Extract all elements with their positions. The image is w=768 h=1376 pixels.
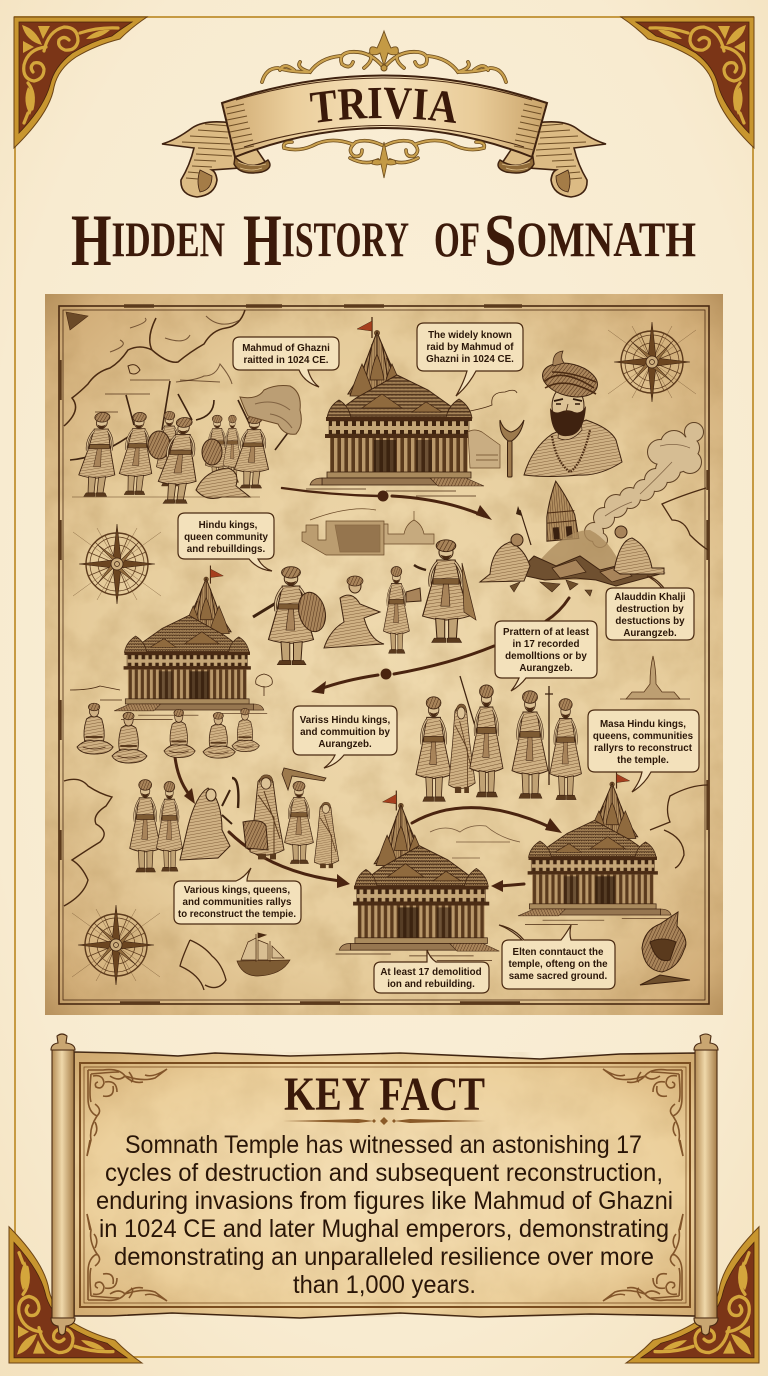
key fact body text: than 1,000 years. [293, 1271, 476, 1299]
ribbon left tail [162, 122, 270, 197]
warrior swords [70, 381, 290, 460]
stupa sketch [620, 656, 690, 699]
sketch clouds [430, 826, 520, 858]
speech bubble: various kings and queens: and communities rallys [183, 897, 292, 908]
speech bubble: Masa Hindu kings [588, 710, 699, 792]
arrow: centre temple to right temple [412, 808, 552, 828]
title [71, 200, 696, 282]
key fact body text: in 1024 CE and later Mughal emperors, demonstrating [99, 1215, 669, 1243]
compass rose: top right [608, 322, 696, 402]
ornament above ribbon [262, 31, 506, 82]
speech bubble: widely known raid [417, 323, 523, 396]
fort with dome [302, 509, 434, 555]
key fact heading: KEY FACT [284, 1068, 485, 1121]
speech bubble: Hindu kings: queen community [184, 532, 268, 543]
speech bubble: Mahmud raid [233, 337, 339, 387]
speech bubble: various kings and queens: to reconstruct the tempie. [178, 909, 296, 920]
royals greeting: bottom left [130, 768, 339, 872]
speech bubble: Mahmud raid: raitted in 1024 CE. [244, 355, 329, 366]
title: H [243, 200, 282, 282]
temple: bottom centre [336, 791, 499, 961]
noble figure [414, 540, 476, 642]
curved arrows [175, 488, 569, 886]
speech bubble: Mahmud raid: Mahmud of Ghazni [242, 343, 330, 354]
speech bubble: 17 demolitions pattern [495, 621, 597, 691]
speech bubble: 17 demolitions pattern: demolltions or by [505, 651, 587, 662]
speech bubble: Alauddin Khalji: Alauddin Khalji [614, 592, 686, 603]
speech bubble: Hindu kings [178, 513, 274, 571]
key fact body text [96, 1131, 673, 1299]
speech bubble: at least 17 [374, 950, 489, 993]
speech bubble: Masa Hindu kings: Masa Hindu kings, [600, 719, 686, 730]
compass rose: lower left [72, 905, 160, 985]
royal group: right centre [416, 676, 581, 801]
arrow: seated group to royals [175, 757, 192, 798]
heading divider [283, 1117, 486, 1125]
speech bubble: 17 demolitions pattern: in 17 recorded [513, 639, 579, 650]
ribbon right tail [498, 122, 606, 197]
key fact body text: enduring invasions from figures like Mahmud of Ghazni [96, 1187, 673, 1215]
key fact body text: cycles of destruction and subsequent reconstruction, [105, 1159, 663, 1187]
corner ornament: top left [14, 17, 147, 148]
speech bubble: Masa Hindu kings: rallyrs to reconstruct [594, 743, 693, 754]
panel: key fact scroll [51, 1034, 718, 1335]
title: OF [434, 211, 480, 267]
sailing ship [237, 933, 290, 976]
speech bubble: Variss Hindu kings: Aurangzeb. [318, 739, 372, 750]
smoke plume [585, 423, 703, 547]
arrow: to ruins [392, 496, 484, 516]
map sketch: top-left coastline [64, 310, 245, 426]
ruined temple scene [480, 423, 703, 596]
small tree and shrine sketches [70, 674, 272, 700]
portrait: Mahmud of Ghazni [524, 351, 622, 476]
kneeling labourer right [614, 526, 664, 574]
boy with basket [383, 566, 409, 653]
bending figure with staff [253, 567, 329, 665]
right scroll roller [694, 1034, 718, 1335]
seated devotees [77, 703, 259, 763]
ribbon main band [222, 76, 547, 157]
arrow: right temple to centre [500, 884, 524, 886]
title: ISTORY [282, 211, 409, 267]
arrow heads and markers [184, 490, 562, 892]
speech bubble: at least 17: ion and rebuilding. [387, 979, 475, 990]
ribbon label: TRIVIA: TRIVIA [310, 88, 456, 124]
speech bubble: Variss Hindu kings: Variss Hindu kings, [300, 715, 390, 726]
kneeling queen [180, 788, 232, 860]
speech bubble: often reconstruct: Elten conntauct the [513, 947, 604, 958]
ribbon banner [162, 30, 606, 198]
key fact body text: Somnath Temple has witnessed an astonishing 17 [125, 1131, 642, 1159]
smoke banner [240, 386, 301, 434]
key fact body text: demonstrating an unparalleled resilience over more [114, 1243, 654, 1271]
speech bubble: widely known raid: The widely known [428, 330, 512, 341]
title: OMNATH [517, 211, 696, 267]
left scroll roller [51, 1034, 75, 1335]
speech bubble: at least 17: At least 17 demolitiod [380, 967, 482, 978]
speech bubble: various kings and queens [174, 868, 301, 924]
warriors charging [70, 381, 301, 503]
speech bubble: Masa Hindu kings: the temple. [617, 755, 669, 766]
speech bubble: often reconstruct: temple, ofteng on the [508, 959, 608, 970]
temple: left [114, 566, 267, 719]
title: S [484, 200, 517, 282]
speech bubble: often reconstruct: same sacred ground. [509, 971, 608, 982]
speech bubble: Hindu kings: and rebuilldings. [187, 544, 265, 555]
speech bubble: Hindu kings: Hindu kings, [199, 520, 258, 531]
island sketch [180, 940, 226, 990]
scroll corner flourishes [87, 1069, 683, 1301]
title: IDDEN [112, 211, 225, 267]
kneeling labourer left [480, 534, 530, 582]
map sketch: bottom-left coast [64, 779, 112, 906]
speech bubble: Alauddin Khalji: Aurangzeb. [623, 628, 677, 639]
arrow: bubble to marker [394, 646, 494, 674]
corner ornament: bottom right [626, 1227, 759, 1363]
speech bubble: Variss Hindu kings: and commuition by [300, 727, 390, 738]
scroll parchment [74, 1052, 696, 1318]
dust and rubble [528, 530, 622, 580]
ornament below ribbon [284, 140, 484, 178]
speech bubble: Alauddin Khalji: destruction by [616, 604, 684, 615]
compass rose: left [73, 524, 161, 604]
speech bubble: Variss Hindu kings [293, 706, 397, 768]
speech bubble: Alauddin Khalji: destuctions by [615, 616, 685, 627]
corner ornament: bottom left [9, 1227, 142, 1363]
map sketch: right coast [662, 488, 708, 550]
speech bubble: Alauddin Khalji [606, 576, 694, 640]
ridge shrine and trees [468, 430, 500, 468]
fallen warrior [196, 468, 250, 498]
arrow: marker to temple [320, 675, 378, 689]
temple: top centre [306, 317, 484, 496]
cloud sketch near portrait [470, 390, 517, 411]
statue head [640, 912, 690, 985]
shield left [148, 431, 170, 459]
title: H [71, 200, 112, 282]
speech bubble: widely known raid: raid by Mahmud of [426, 342, 514, 353]
speech bubble: various kings and queens: Various kings, queens, [184, 885, 290, 896]
speech bubble: 17 demolitions pattern: Prattern of at least [503, 627, 590, 638]
map sketch: right coast lower [650, 785, 708, 868]
scene: kings and rebuilders [253, 540, 476, 665]
trident weapon [500, 420, 524, 477]
speech bubble: 17 demolitions pattern: Aurangzeb. [519, 663, 573, 674]
corner ornament: top right [621, 17, 754, 148]
temple: right [518, 771, 675, 924]
speech bubble: Masa Hindu kings: queens, communities [593, 731, 694, 742]
arrow: first segment [282, 488, 379, 496]
arrow: ruins to bubble [546, 598, 569, 621]
speech bubble: widely known raid: Ghazni in 1024 CE. [426, 354, 514, 365]
speech bubble: often reconstruct [499, 925, 615, 989]
grain sacks [243, 821, 268, 850]
panel: illustrated map of Somnath's history [45, 294, 723, 1015]
kneeling figure [324, 576, 384, 648]
leaning tower [542, 480, 579, 541]
arrow: royals to centre temple [229, 832, 340, 881]
